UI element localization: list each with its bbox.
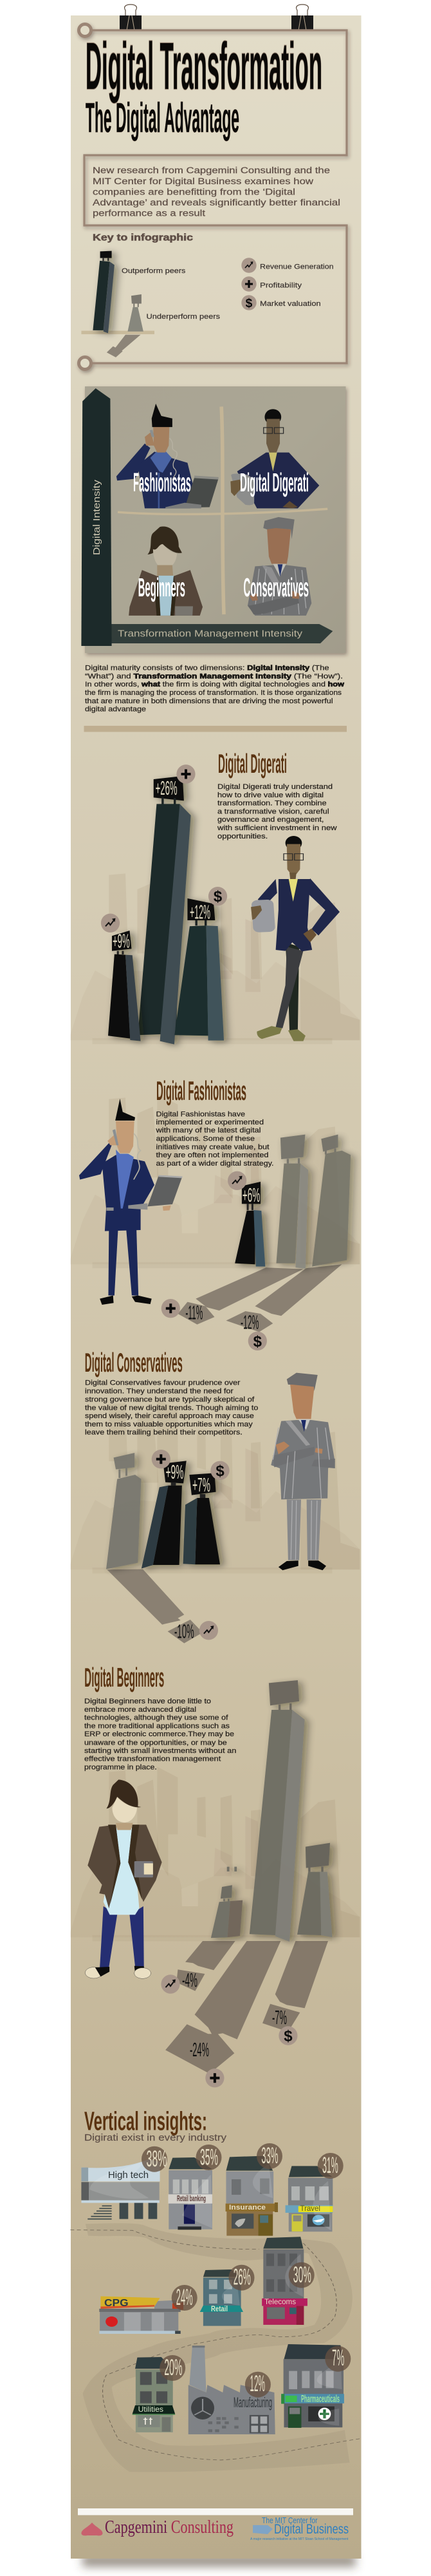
clip left	[120, 5, 142, 30]
maturity explanation text	[85, 665, 345, 714]
building names: Travel	[300, 2204, 320, 2213]
percentage values: 35%	[200, 2145, 218, 2170]
ghost bar	[106, 1453, 141, 1569]
description: technologies, although they use some of	[84, 1714, 228, 1722]
intro text block	[93, 166, 340, 218]
building names: Insurance	[229, 2204, 266, 2211]
description: a transformative vision, careful	[217, 808, 329, 815]
icon: market valuation	[248, 1332, 267, 1350]
building names: Telecoms	[264, 2297, 296, 2306]
quadrant figures	[116, 404, 327, 616]
key heading: Key to infographic	[93, 233, 193, 243]
maturity explanation text: the firm is managing the process of transformation. It is those organizations	[85, 689, 342, 697]
figure: beginner bust	[129, 527, 203, 616]
key bars	[81, 251, 154, 357]
outperforming bars	[142, 1461, 187, 1569]
description: transformation. They combine	[217, 800, 327, 808]
description: Digital Beginners have done little to	[84, 1698, 211, 1705]
panel: maturity quadrant	[81, 386, 346, 653]
logo: MIT Center for Digital Business: Digital Business	[274, 2522, 349, 2537]
description: applications. Some of these	[156, 1135, 255, 1143]
axis arrow: transformation management intensity	[107, 624, 333, 643]
label revenue: Revenue Generation	[260, 263, 333, 271]
key label outperform: Outperform peers	[122, 267, 186, 275]
figure: digital beginner woman	[85, 1779, 162, 1978]
bulldog clips	[120, 5, 313, 30]
clip right	[291, 5, 313, 30]
percentage values: 26%	[234, 2265, 251, 2290]
building names: Utilities	[138, 2405, 163, 2414]
intro text block: MIT Center for Digital Business examines how	[93, 176, 313, 186]
percentage values: 24%	[176, 2285, 193, 2310]
buildings	[81, 2156, 344, 2434]
description: they are often not implemented	[156, 1151, 269, 1159]
panel: Digital Conservatives: -10%	[174, 1620, 194, 1642]
building: retail banking	[168, 2157, 212, 2230]
description: with many of the latest digital	[155, 1127, 261, 1135]
logo: Capgemini Consulting: Capgemini Consulting	[105, 2517, 234, 2537]
building: CPG	[99, 2297, 183, 2334]
panel: vertical insights: 31%	[322, 2153, 338, 2178]
axis arrow: digital intensity: Digital Intensity	[92, 479, 102, 555]
description: opportunities.	[217, 833, 268, 840]
panel: maturity quadrant: Digital Digerati	[240, 468, 309, 497]
logo: MIT Center for Digital Business: The MIT Center for	[262, 2515, 318, 2525]
bar chart	[106, 1453, 220, 1643]
icon: profitability	[176, 764, 196, 784]
building names: CPG	[104, 2298, 129, 2309]
description: the more traditional applications such as	[84, 1722, 230, 1730]
building names	[104, 2170, 340, 2414]
panel: Digital Conservatives: +7%	[192, 1473, 210, 1496]
description	[155, 1110, 274, 1168]
header frame line	[78, 24, 347, 370]
description: with sufficient investment in new	[217, 824, 337, 832]
percentage values: 38%	[147, 2146, 167, 2172]
description: starting with small investments without an	[84, 1747, 236, 1755]
footer white bar	[78, 2508, 353, 2515]
heading: Vertical insights:	[84, 2107, 207, 2136]
panel: Digital Fashionistas: -12%	[241, 1311, 259, 1333]
figure: digital digerati man	[251, 836, 340, 1041]
axis arrow: digital intensity	[81, 388, 112, 646]
figure: digital conservative man	[271, 1373, 335, 1570]
panel: maturity quadrant: Fashionistas	[133, 468, 191, 497]
description: the value of new digital trends. Though aiming to	[85, 1404, 258, 1412]
icon: market valuation	[208, 887, 227, 905]
building names: High tech	[108, 2170, 149, 2181]
building: pharmaceuticals	[281, 2344, 344, 2428]
logo: MIT Center for Digital Business: A major research initiative at the MIT Sloan School of Management	[250, 2537, 349, 2541]
spotlight beams on buildings	[89, 2159, 342, 2426]
percentage values: 12%	[250, 2371, 265, 2396]
intro text block: Advantage’ and reveals significantly better financial	[93, 198, 340, 207]
icon: market valuation	[241, 295, 257, 310]
intro text block: New research from Capgemini Consulting and the	[93, 166, 330, 175]
icon: revenue	[228, 1171, 246, 1190]
description	[217, 783, 337, 840]
description: how to drive value with digital	[217, 791, 324, 799]
panel: Digital Digerati: +26%	[156, 777, 178, 799]
skyline backdrop	[70, 1399, 360, 1573]
intro text block: companies are benefitting from the ‘Digital	[93, 187, 295, 197]
percentage values: 33%	[261, 2143, 278, 2168]
building names: Retail	[211, 2304, 228, 2313]
panel: Digital Beginners: -4%	[182, 1969, 197, 1991]
building names: Manufacturing	[234, 2394, 272, 2410]
description: them to miss valuable opportunities which may	[85, 1421, 253, 1428]
icon: market valuation	[279, 2026, 297, 2045]
panel: Digital Digerati: +9%	[113, 930, 130, 952]
panel: Digital Fashionistas: -11%	[185, 1301, 203, 1323]
maturity explanation text: “What”) and Transformation Management Intensity (The “How”).	[85, 672, 343, 680]
icon: spade	[81, 2523, 103, 2535]
description: Digital Fashionistas have	[156, 1110, 245, 1118]
description: Digital Conservatives favour prudence over	[85, 1379, 241, 1387]
building: utilities	[133, 2357, 175, 2432]
icon: revenue	[241, 258, 257, 273]
panel: Digital Digerati	[70, 748, 360, 1045]
floor shadow	[107, 1569, 203, 1643]
bar chart	[178, 1135, 351, 1332]
percentage values	[147, 2143, 344, 2396]
description: innovation. They understand the need for	[85, 1388, 234, 1396]
panel: vertical insights: 7%	[332, 2345, 344, 2371]
panel: Digital Beginners: -7%	[272, 2006, 287, 2029]
road map	[70, 2223, 361, 2472]
panel: Digital Beginners: -24%	[190, 2038, 209, 2061]
description: unaware of the opportunities, or may be	[84, 1739, 227, 1747]
bar chart	[165, 1680, 332, 2074]
figure: digerati bust	[230, 409, 319, 508]
building: high tech	[81, 2159, 160, 2219]
icon: profitability	[241, 276, 257, 292]
icon: revenue	[199, 1621, 218, 1640]
description: governance and engagement,	[217, 816, 324, 824]
percentage values: 30%	[293, 2262, 311, 2287]
building names: Retail banking	[177, 2193, 206, 2203]
ghost bars	[250, 1680, 305, 1942]
description: programme in place.	[84, 1763, 157, 1771]
skyline backdrop	[70, 869, 360, 1044]
floor shadows	[165, 1941, 328, 2074]
skyline backdrop	[70, 1094, 360, 1268]
icon: revenue	[101, 914, 120, 933]
panel: Digital Conservatives	[70, 1347, 360, 1643]
description: embrace more advanced digital	[84, 1706, 196, 1714]
figure: fashionista bust	[116, 404, 219, 508]
panel: Digital Beginners: Digital Beginners	[84, 1662, 164, 1692]
subheading: Digirati exist in every industry	[84, 2132, 227, 2143]
underperforming ghost bars	[276, 1135, 308, 1269]
panel: Digital Fashionistas: Digital Fashionistas	[156, 1075, 246, 1106]
description: ERP or electronic commerce.They may be	[84, 1730, 234, 1738]
description: leave them trailing behind their competitors.	[85, 1429, 243, 1437]
maturity explanation text: that are mature in both dimensions that are driving the most powerful	[85, 697, 333, 705]
icon: profitability	[152, 1450, 170, 1468]
panel: Digital Fashionistas	[70, 1075, 360, 1350]
maturity explanation text: Digital maturity consists of two dimensions: Digital Intensity (The	[85, 665, 329, 672]
intro text block: performance as a result	[93, 209, 205, 218]
icon: profitability	[205, 2069, 224, 2087]
maturity explanation text: In other words, what the firm is doing with digital technologies and how	[85, 681, 345, 688]
description: effective transformation management	[84, 1756, 221, 1763]
description: spend wisely, their careful approach may cause	[85, 1412, 254, 1420]
description: strong governance but are typically skeptical of	[85, 1396, 254, 1404]
panel: Digital Fashionistas: +6%	[243, 1184, 260, 1206]
floor shadows	[178, 1264, 342, 1332]
percentage values: 20%	[164, 2355, 182, 2380]
bar chart	[108, 776, 224, 1045]
building: retail	[200, 2269, 243, 2326]
icon: profitability	[161, 1299, 180, 1318]
description: as part of a wider digital strategy.	[156, 1160, 274, 1168]
figure: digital fashionista man	[79, 1099, 183, 1305]
building: manufacturing	[188, 2345, 275, 2434]
label profitability: Profitability	[260, 281, 302, 289]
description	[85, 1379, 258, 1437]
label valuation: Market valuation	[260, 300, 321, 308]
logo: MIT Center for Digital Business	[250, 2515, 349, 2541]
panel: vertical insights	[70, 2107, 361, 2472]
panel: Digital Conservatives: Digital Conservatives	[85, 1347, 183, 1378]
panel: Digital Digerati: Digital Digerati	[218, 748, 287, 779]
panel: Digital Conservatives: +9%	[166, 1461, 183, 1483]
skyline backdrop	[70, 1766, 360, 1941]
quadrant background	[85, 386, 346, 653]
panel: Digital Beginners	[70, 1662, 360, 2087]
axis arrow: transformation management intensity: Transformation Management Intensity	[118, 629, 303, 639]
building: travel	[286, 2166, 333, 2231]
outperforming bar	[235, 1182, 265, 1267]
maturity explanation text: digital advantage	[85, 706, 146, 714]
key label underperform: Underperform peers	[147, 313, 221, 321]
figure: conservative bust	[248, 517, 311, 616]
paper background	[71, 15, 362, 2559]
icon: market valuation	[210, 1461, 230, 1480]
building: insurance	[226, 2156, 278, 2236]
description: implemented or experimented	[156, 1119, 264, 1126]
panel: Digital Digerati: +12%	[190, 901, 210, 923]
icon: revenue	[161, 1975, 180, 1994]
description: Digital Digerati truly understand	[217, 783, 333, 791]
panel: vertical insights: Pharmaceuticals	[301, 2394, 340, 2405]
building: telecoms	[262, 2237, 307, 2325]
panel: maturity quadrant: Beginners	[138, 573, 185, 602]
percentage bubbles	[142, 2143, 351, 2398]
panel: key to infographic	[81, 233, 333, 357]
paper shadow	[82, 2554, 356, 2567]
panel: maturity quadrant: Conservatives	[243, 573, 309, 602]
description	[84, 1698, 236, 1771]
description: initiatives may create value, but	[156, 1143, 270, 1151]
